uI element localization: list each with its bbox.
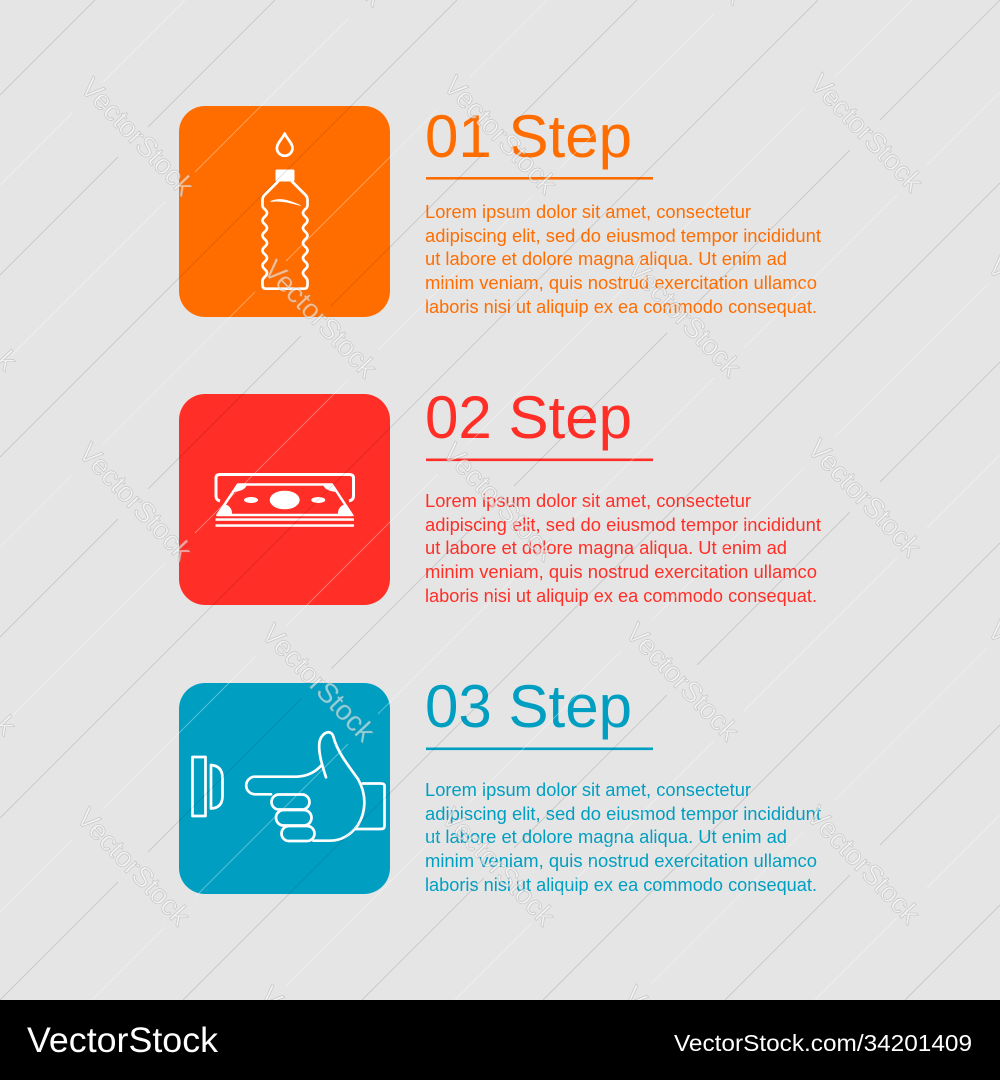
step 3 text block: ut labore et dolore magna aliqua. Ut enim ad bbox=[425, 826, 787, 847]
step 2 text block: Lorem ipsum dolor sit amet, consectetur bbox=[425, 490, 751, 511]
footer brand: VectorStock bbox=[27, 1021, 219, 1060]
step 3 text block: adipiscing elit, sed do eiusmod tempor incididunt bbox=[425, 803, 821, 824]
watermarks: VectorStock bbox=[802, 433, 928, 563]
step 1 text block: laboris nisi ut aliquip ex ea commodo consequat. bbox=[425, 296, 817, 317]
watermarks: VectorStock bbox=[622, 253, 748, 383]
icon: cash dispenser bbox=[216, 474, 354, 527]
watermarks: VectorStock bbox=[438, 70, 564, 200]
watermarks: VectorStock bbox=[436, 802, 562, 932]
step 2 text block: adipiscing elit, sed do eiusmod tempor incididunt bbox=[425, 514, 821, 535]
icon: pointing hand and button bbox=[192, 732, 384, 841]
step 2 text block: ut labore et dolore magna aliqua. Ut enim ad bbox=[425, 537, 787, 558]
step 1 text block: ut labore et dolore magna aliqua. Ut enim ad bbox=[425, 248, 787, 269]
heading: 03 Step: 03 Step bbox=[425, 673, 632, 740]
step 3 text block: minim veniam, quis nostrud exercitation ullamco bbox=[425, 850, 817, 871]
icon: plastic bottle bbox=[262, 170, 308, 289]
step 1 text block: Lorem ipsum dolor sit amet, consectetur bbox=[425, 201, 751, 222]
footer image id: VectorStock.com/34201409 bbox=[674, 1030, 972, 1056]
step 3 text block bbox=[425, 673, 821, 895]
watermarks: V bbox=[254, 980, 289, 1015]
panel: step 3 icon tile bbox=[179, 683, 390, 894]
step 3 text block: Lorem ipsum dolor sit amet, consectetur bbox=[425, 779, 751, 800]
watermarks: VectorStock bbox=[620, 617, 746, 747]
step 3 text block: laboris nisi ut aliquip ex ea commodo consequat. bbox=[425, 874, 817, 895]
icon: water drop bbox=[277, 134, 292, 156]
heading: 01 Step: 01 Step bbox=[425, 103, 632, 170]
watermarks: VectorStock bbox=[437, 437, 563, 567]
footer bar bbox=[0, 1000, 1000, 1080]
step 1 text block: adipiscing elit, sed do eiusmod tempor incididunt bbox=[425, 225, 821, 246]
step 1 text block: minim veniam, quis nostrud exercitation ullamco bbox=[425, 272, 817, 293]
watermarks: VectorStock bbox=[75, 72, 201, 202]
panel: step 1 icon tile bbox=[179, 106, 390, 317]
watermarks: VectorStock bbox=[801, 800, 927, 930]
heading: 02 Step: 02 Step bbox=[425, 384, 632, 451]
watermarks: V bbox=[618, 980, 653, 1015]
watermarks: VectorStock bbox=[73, 437, 199, 567]
panel: step 2 icon tile bbox=[179, 394, 390, 605]
step 1 text block bbox=[425, 103, 821, 317]
step 2 text block: laboris nisi ut aliquip ex ea commodo consequat. bbox=[425, 585, 817, 606]
watermarks: VectorStock bbox=[71, 802, 197, 932]
watermarks: VectorStock bbox=[258, 254, 384, 384]
step 2 text block: minim veniam, quis nostrud exercitation ullamco bbox=[425, 561, 817, 582]
step 2 text block bbox=[425, 384, 821, 606]
watermarks: VectorStock bbox=[804, 68, 930, 198]
watermarks: VectorStock bbox=[256, 618, 382, 748]
